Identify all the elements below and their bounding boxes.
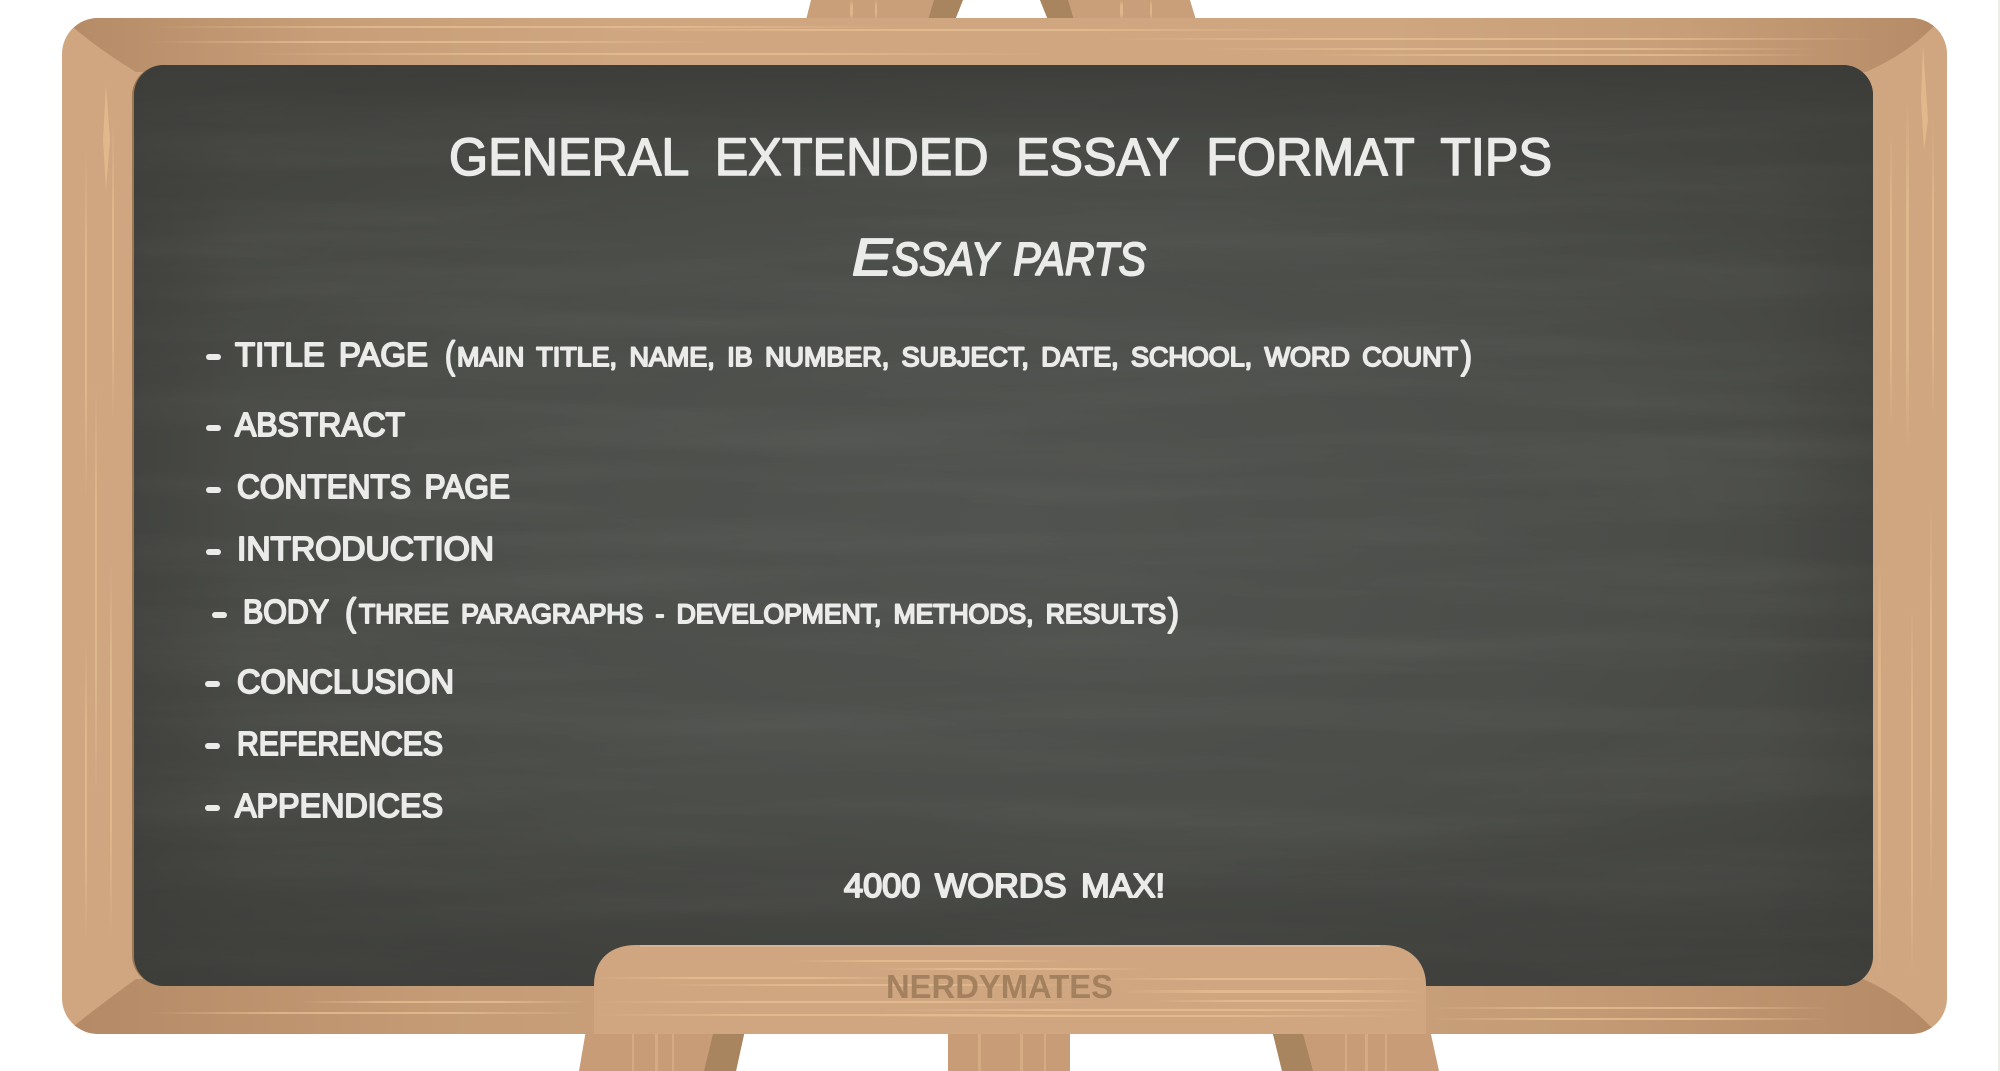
- list item: title page: MAIN TITLE, NAME, IB NUMBER, SUBJECT, DATE, SCHOOL, WORD COUNT: [457, 342, 1458, 372]
- list item: title page: ): [1461, 335, 1472, 377]
- list item: body: ): [1168, 592, 1179, 634]
- list item: title page: [206, 335, 1472, 377]
- callout: word limit: 4000 WORDS MAX!: [844, 867, 1165, 904]
- list item: title page: (: [445, 335, 455, 377]
- frame bottom bevel: [62, 979, 1947, 1034]
- brand label: NERDYMATES: [886, 968, 1113, 1005]
- list item: references: REFERENCES: [237, 725, 443, 762]
- frame top bevel: [62, 18, 1947, 72]
- list item: body: BODY: [243, 593, 329, 630]
- list item: abstract: ABSTRACT: [235, 406, 405, 443]
- list item: introduction: INTRODUCTION: [237, 530, 494, 567]
- page edge line: [1998, 0, 2000, 1071]
- list item: body: (: [345, 592, 356, 634]
- easel legs bottom: [579, 1030, 1439, 1071]
- list item: appendices: APPENDICES: [235, 787, 443, 824]
- list item: body: [212, 592, 1179, 634]
- subheading: essay parts: E: [852, 229, 894, 287]
- title: GENERAL EXTENDED ESSAY FORMAT TIPS: [449, 128, 1552, 187]
- list item: contents page: CONTENTS PAGE: [237, 468, 510, 505]
- easel shelf: [594, 945, 1426, 1034]
- list item: title page: TITLE PAGE: [235, 336, 428, 373]
- list item: body: THREE PARAGRAPHS - DEVELOPMENT, METHODS, RESULTS: [359, 599, 1166, 629]
- blackboard surface: [132, 65, 1873, 986]
- list item: conclusion: CONCLUSION: [237, 663, 454, 700]
- easel legs top: [806, 0, 1196, 20]
- subheading: essay parts: SSAY PARTS: [892, 233, 1146, 285]
